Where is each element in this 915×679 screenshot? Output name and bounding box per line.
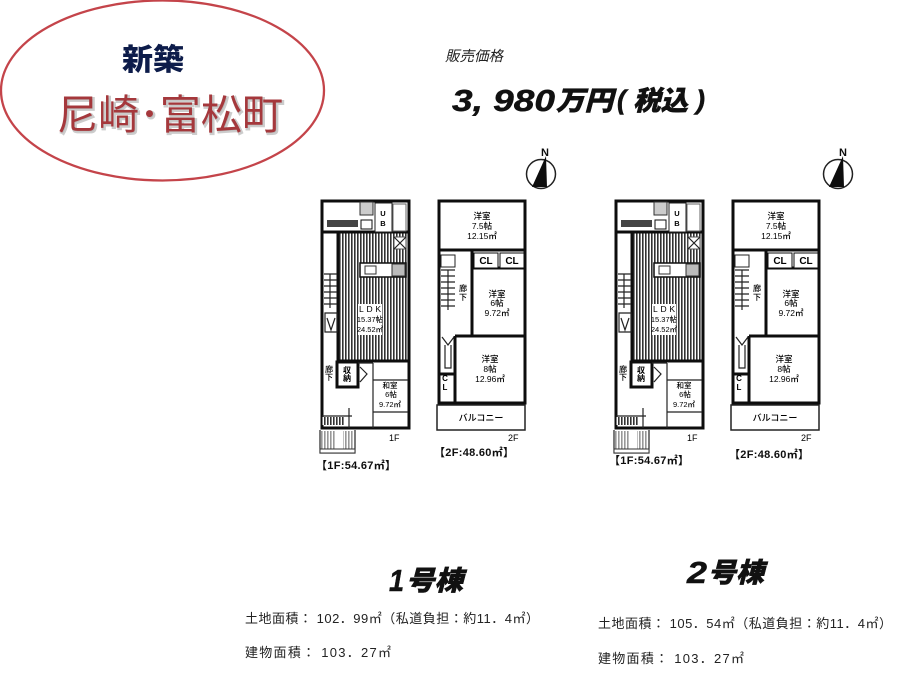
- closets: CL: [799, 256, 813, 267]
- storage closet: [631, 362, 652, 387]
- storage closet: 収: [343, 366, 351, 375]
- wash room and bath: U: [674, 209, 680, 218]
- floor area 2F: 【2F:48.60㎡】: [729, 448, 809, 461]
- room labels upper western room: [467, 211, 497, 241]
- closet 2F lower: L: [443, 383, 448, 392]
- LDK room label: 15.37帖: [651, 314, 678, 324]
- lower western room: 洋室: [481, 354, 499, 364]
- Japanese room: 6帖: [385, 389, 397, 399]
- Japanese room: 和室: [676, 380, 692, 390]
- toilet 2F: [442, 337, 454, 368]
- first floor walls: [616, 201, 703, 428]
- Japanese room: [358, 363, 408, 428]
- room labels upper western room: 12.15㎡: [761, 231, 791, 241]
- middle western room: 6帖: [490, 298, 504, 308]
- closets: CL: [479, 256, 493, 267]
- unit 2 heading: [686, 555, 768, 590]
- floor plan: unit 1: [316, 147, 556, 472]
- hallway 2F: 廊: [459, 283, 467, 293]
- LDK striped floor: [338, 233, 408, 361]
- price label: 販売価格: [445, 48, 504, 65]
- balcony: [437, 405, 525, 430]
- closets: [474, 253, 524, 268]
- wash room and bath: B: [674, 219, 680, 228]
- Japanese room: 9.72㎡: [379, 400, 402, 409]
- price value: ): [693, 85, 705, 115]
- hallway label: 下: [325, 373, 333, 382]
- stairs: [324, 274, 337, 308]
- first floor walls: [322, 201, 409, 428]
- hallway label: 下: [619, 373, 627, 382]
- lower western room: 8帖: [483, 364, 497, 374]
- wash room and bath: U: [380, 209, 386, 218]
- second floor stairs: [735, 270, 749, 310]
- middle western room: [484, 289, 510, 318]
- second floor stairs: [441, 270, 455, 310]
- LDK room label: [651, 304, 678, 335]
- floor plan: unit 2: [609, 147, 852, 467]
- stairs: [618, 274, 631, 308]
- middle western room: 洋室: [488, 289, 506, 299]
- toilet 2F: [736, 337, 748, 368]
- unit 1 heading: 号棟: [406, 566, 467, 596]
- room labels upper western room: 7.5帖: [472, 221, 493, 231]
- closets: [768, 253, 818, 268]
- badge heading: new build: 新築: [122, 44, 184, 77]
- LDK room label: 24.52㎡: [357, 325, 384, 334]
- Japanese room: [652, 363, 702, 428]
- storage closet: 納: [343, 373, 351, 383]
- room labels upper western room: 12.15㎡: [467, 231, 497, 241]
- LDK striped floor: [632, 233, 702, 361]
- wash room and bath: B: [380, 219, 386, 228]
- badge red ellipse: [1, 0, 324, 180]
- LDK room label: 24.52㎡: [651, 325, 678, 334]
- unit 2 heading: 号棟: [708, 558, 768, 588]
- lower western room: [475, 354, 505, 384]
- second floor plan: [434, 201, 525, 459]
- icon: north compass: [526, 147, 556, 188]
- floor label 1F: 1F: [389, 433, 400, 443]
- lower western room: 12.96㎡: [769, 374, 799, 384]
- icon: north compass: N: [839, 147, 847, 159]
- hallway 2F: 廊: [753, 283, 761, 293]
- floor label 2F: 2F: [508, 433, 519, 443]
- storage closet: 収: [637, 366, 645, 375]
- first floor plan: [609, 201, 703, 467]
- LDK room label: LDK: [653, 304, 675, 314]
- badge location name: 尼崎･富松町: [58, 94, 284, 140]
- unit 2 heading: 2: [686, 555, 707, 590]
- hallway 2F: 下: [459, 293, 467, 302]
- storage: [441, 255, 455, 267]
- price value: 万円: [556, 86, 617, 116]
- middle western room: 9.72㎡: [778, 308, 804, 318]
- toilet: [325, 313, 337, 332]
- second floor walls: [439, 201, 525, 403]
- middle western room: [778, 289, 804, 318]
- Japanese room: 9.72㎡: [673, 400, 696, 409]
- floor area 2F: 【2F:48.60㎡】: [434, 446, 514, 459]
- toilet: [619, 313, 631, 332]
- second floor plan: [729, 201, 819, 461]
- unit 1 land area: 土地面積： 102．99㎡（私道負担：約11．4㎡）: [245, 611, 539, 626]
- lower western room: [769, 354, 799, 384]
- unit 1 building area: 建物面積： 103．27㎡: [245, 645, 391, 660]
- Japanese room: 和室: [382, 380, 398, 390]
- room labels upper western room: 洋室: [473, 211, 491, 221]
- kitchen counter: [360, 237, 406, 277]
- floor area 1F: 【1F:54.67㎡】: [316, 459, 396, 472]
- storage closet: 納: [637, 373, 645, 383]
- icon: north compass: [824, 147, 852, 188]
- middle western room: 6帖: [784, 298, 798, 308]
- wash room and bath: [327, 202, 406, 232]
- closets: CL: [505, 256, 519, 267]
- room labels upper western room: 7.5帖: [766, 221, 787, 231]
- balcony: [731, 405, 819, 430]
- closets: CL: [773, 256, 787, 267]
- balcony: バルコニー: [753, 413, 797, 423]
- hallway 2F: 下: [753, 293, 761, 302]
- second floor walls: [733, 201, 819, 403]
- storage: [735, 255, 749, 267]
- floor area 1F: 【1F:54.67㎡】: [609, 454, 689, 467]
- lower western room: 8帖: [777, 364, 791, 374]
- lower western room: 12.96㎡: [475, 374, 505, 384]
- unit 2 building area: 建物面積： 103．27㎡: [598, 651, 744, 666]
- price value: [452, 83, 705, 118]
- area badge: new build, Amagasaki Tomimatsu-cho: [1, 0, 324, 180]
- storage closet: [337, 362, 358, 387]
- LDK room label: LDK: [359, 304, 381, 314]
- entry and porch: [614, 408, 649, 453]
- kitchen counter: [654, 237, 700, 277]
- first floor plan: [316, 201, 409, 472]
- icon: north compass: N: [541, 147, 549, 159]
- floor label 1F: 1F: [687, 433, 698, 443]
- room labels upper western room: 洋室: [767, 211, 785, 221]
- unit 1 heading: [389, 563, 467, 598]
- room labels upper western room: [761, 211, 791, 241]
- price value: (: [617, 85, 629, 115]
- hallway label: 廊: [619, 364, 627, 374]
- price value: 3, 980: [452, 83, 555, 118]
- middle western room: 洋室: [782, 289, 800, 299]
- LDK room label: [357, 304, 384, 335]
- badge location name: 尼崎･富松町: [57, 92, 283, 138]
- entry and porch: [320, 408, 355, 453]
- unit 1 heading: 1: [389, 563, 404, 598]
- wash room and bath: [621, 202, 700, 232]
- balcony: バルコニー: [459, 413, 503, 423]
- Japanese room: 6帖: [679, 389, 691, 399]
- closet 2F lower: C: [736, 374, 742, 383]
- lower western room: 洋室: [775, 354, 793, 364]
- price value: 税込: [633, 86, 689, 116]
- middle western room: 9.72㎡: [484, 308, 510, 318]
- unit 2 land area: 土地面積： 105．54㎡（私道負担：約11．4㎡）: [598, 616, 892, 631]
- closet 2F lower: C: [442, 374, 448, 383]
- floor label 2F: 2F: [801, 433, 812, 443]
- LDK room label: 15.37帖: [357, 314, 384, 324]
- closet 2F lower: L: [737, 383, 742, 392]
- hallway label: 廊: [325, 364, 333, 374]
